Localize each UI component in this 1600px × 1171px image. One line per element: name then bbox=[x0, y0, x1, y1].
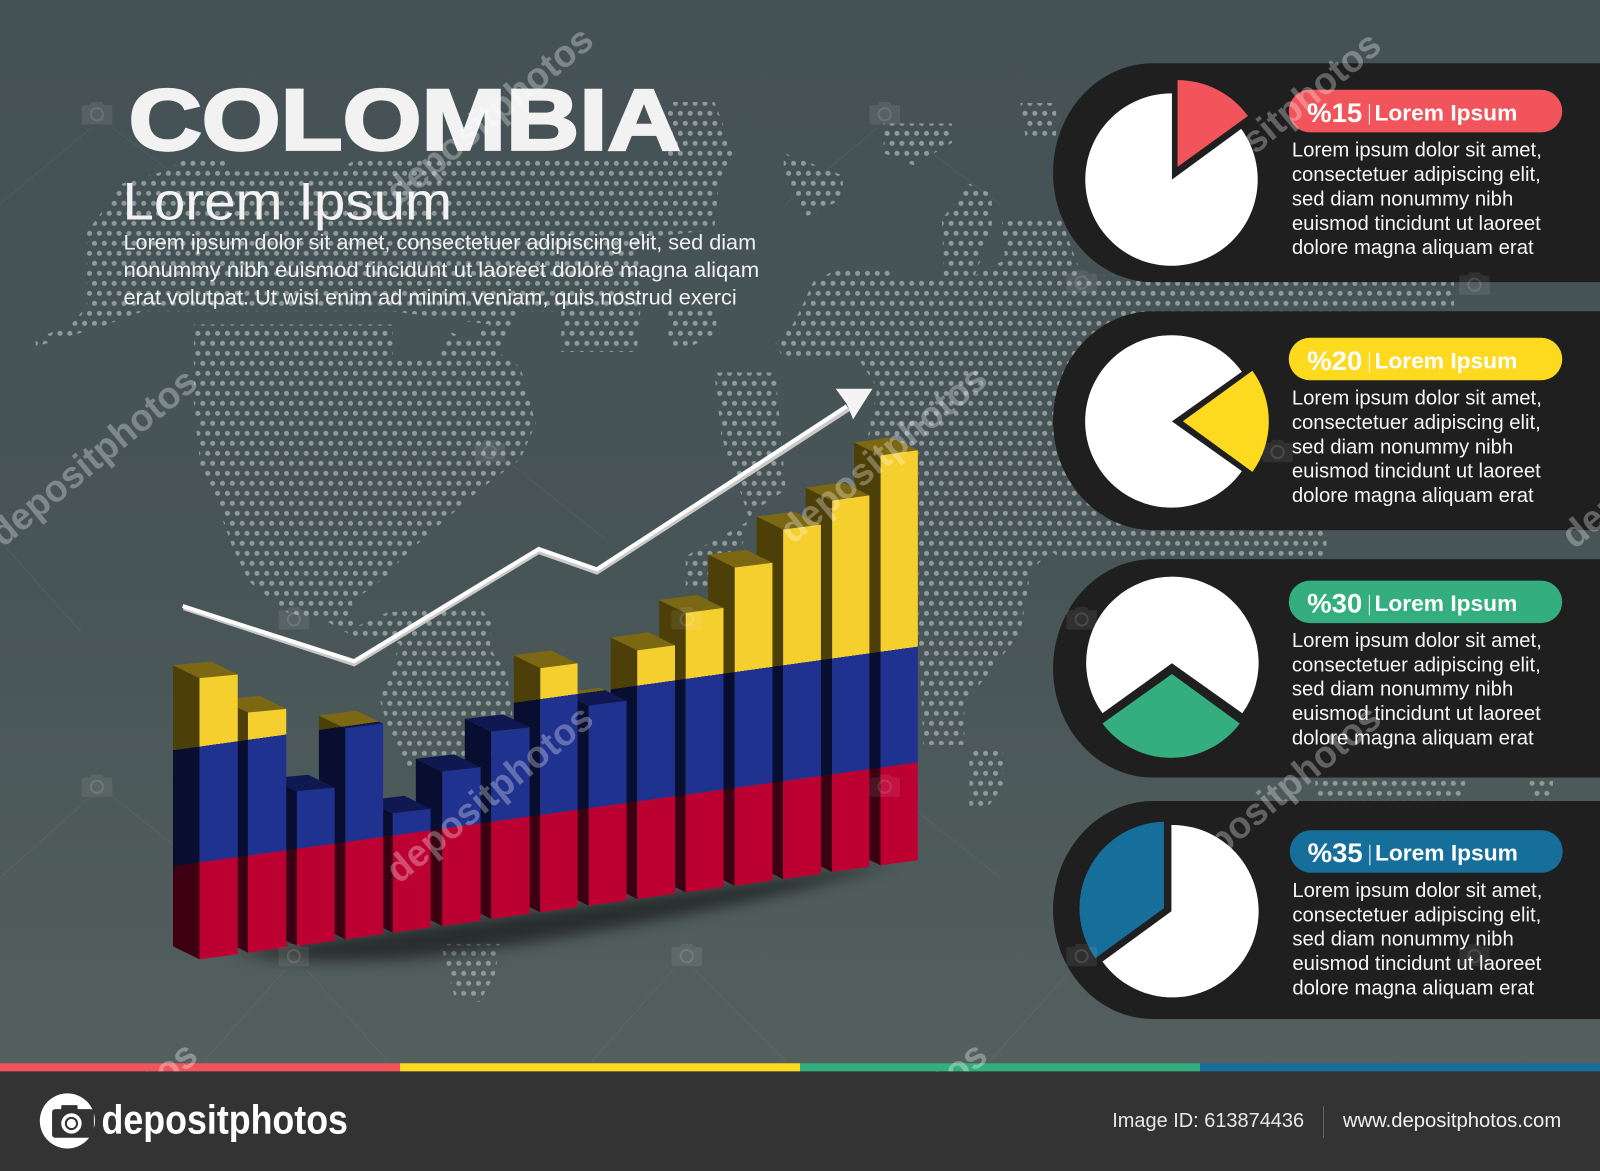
bar 4 bbox=[319, 711, 383, 939]
body text 1 bbox=[1292, 140, 1542, 259]
bar 14 bbox=[806, 482, 869, 872]
body text 1: euismod tincidunt ut laoreet bbox=[1292, 213, 1541, 235]
label pill 2: Lorem Ipsum bbox=[1374, 348, 1517, 373]
body text 4: consectetuer adipiscing elit, bbox=[1292, 904, 1541, 926]
body text 3: dolore magna aliquam erat bbox=[1292, 727, 1534, 749]
watermark text bbox=[0, 18, 1600, 891]
bar 10 bbox=[611, 632, 675, 899]
bar 6 bbox=[416, 754, 481, 926]
subtitle: Lorem Ipsum bbox=[122, 172, 452, 231]
intro paragraph: Lorem ipsum dolor sit amet, consectetuer adipiscing elit, sed diam bbox=[123, 230, 756, 254]
colour stripe bbox=[0, 1063, 1600, 1071]
label pill 2 bbox=[1289, 338, 1562, 380]
footer image id: Image ID: 613874436 bbox=[1112, 1110, 1304, 1132]
body text 3: Lorem ipsum dolor sit amet, bbox=[1292, 630, 1542, 652]
body text 1: consectetuer adipiscing elit, bbox=[1292, 164, 1541, 186]
title: COLOMBIA bbox=[129, 71, 681, 168]
footer bar bbox=[0, 1071, 1600, 1171]
bar 3 bbox=[270, 775, 335, 946]
watermark text: depositphotos bbox=[1165, 23, 1389, 217]
watermark text: depositphotos bbox=[377, 696, 601, 891]
body text 3: euismod tincidunt ut laoreet bbox=[1292, 703, 1541, 725]
body text 1: Lorem ipsum dolor sit amet, bbox=[1292, 140, 1542, 162]
body text 4: Lorem ipsum dolor sit amet, bbox=[1292, 880, 1542, 902]
bar 7 bbox=[465, 714, 530, 919]
body text 4: dolore magna aliquam erat bbox=[1292, 977, 1534, 999]
decorative watermark lines bbox=[0, 128, 1071, 1061]
body text 1: sed diam nonummy nibh bbox=[1292, 188, 1513, 210]
intro paragraph: nonummy nibh euismod tincidunt ut laoreet dolore magna aliqam bbox=[123, 258, 759, 282]
bar 15 bbox=[854, 437, 918, 865]
label pill 3: Lorem Ipsum bbox=[1374, 591, 1517, 616]
body text 2 bbox=[1292, 388, 1542, 507]
label pill 4 bbox=[1290, 830, 1563, 873]
pie 1 bbox=[1085, 80, 1258, 266]
body text 1: dolore magna aliquam erat bbox=[1292, 237, 1534, 259]
watermark text: depositphotos bbox=[1165, 696, 1389, 891]
label pill 4: %35 bbox=[1308, 838, 1363, 868]
footer divider bbox=[1323, 1106, 1324, 1138]
watermark camera icons bbox=[82, 102, 1490, 966]
3D bar chart in flag colours bbox=[173, 437, 918, 959]
label pill 1: Lorem Ipsum bbox=[1374, 100, 1517, 125]
body text 4: euismod tincidunt ut laoreet bbox=[1292, 953, 1542, 975]
bar chart shadow bbox=[235, 862, 898, 961]
arrow: rising trend line bbox=[183, 389, 872, 664]
body text 2: euismod tincidunt ut laoreet bbox=[1292, 461, 1541, 483]
bar 9 bbox=[562, 688, 627, 906]
pie 2 bbox=[1085, 335, 1269, 508]
footer website: www.depositphotos.com bbox=[1342, 1110, 1561, 1132]
dotted world map bbox=[36, 102, 1553, 1002]
body text 2: Lorem ipsum dolor sit amet, bbox=[1292, 388, 1542, 410]
intro paragraph bbox=[123, 230, 759, 310]
body text 3: consectetuer adipiscing elit, bbox=[1292, 654, 1541, 676]
label pill 3 bbox=[1289, 581, 1562, 623]
label pill 2: %20 bbox=[1307, 346, 1362, 376]
pie 4 bbox=[1079, 822, 1259, 997]
bar 5 bbox=[366, 796, 431, 933]
body text 4 bbox=[1292, 880, 1542, 999]
bar 1 bbox=[173, 662, 238, 959]
footer logo bbox=[40, 1093, 348, 1148]
body text 2: dolore magna aliquam erat bbox=[1292, 485, 1534, 507]
body text 3: sed diam nonummy nibh bbox=[1292, 679, 1513, 701]
pie 3 bbox=[1086, 577, 1259, 758]
panel 1: 15 percent bbox=[1053, 63, 1600, 282]
watermark text: depositphotos bbox=[377, 18, 601, 212]
label pill 1: %15 bbox=[1307, 98, 1362, 128]
footer logo: depositphotos bbox=[102, 1097, 348, 1143]
label pill 3: %30 bbox=[1307, 589, 1362, 619]
bar 13 bbox=[757, 512, 821, 879]
label pill 4: Lorem Ipsum bbox=[1375, 841, 1518, 866]
body text 3 bbox=[1292, 630, 1542, 749]
bar 11 bbox=[659, 595, 723, 892]
body text 2: sed diam nonummy nibh bbox=[1292, 436, 1513, 458]
panel 3: 30 percent bbox=[1053, 559, 1600, 778]
panel 2: 20 percent bbox=[1053, 311, 1600, 530]
body text 2: consectetuer adipiscing elit, bbox=[1292, 412, 1541, 434]
bar 8 bbox=[514, 650, 578, 912]
bar 12 bbox=[708, 550, 772, 886]
label pill 1 bbox=[1289, 90, 1562, 132]
panel 4: 35 percent bbox=[1053, 801, 1600, 1019]
clipped watermark text above stripe bbox=[0, 1033, 995, 1171]
watermark text: depositphotos bbox=[771, 356, 995, 551]
bar 2 bbox=[221, 696, 286, 953]
body text 4: sed diam nonummy nibh bbox=[1292, 929, 1514, 951]
intro paragraph: erat volutpat. Ut wisi enim ad minim veniam, quis nostrud exerci bbox=[123, 286, 737, 310]
